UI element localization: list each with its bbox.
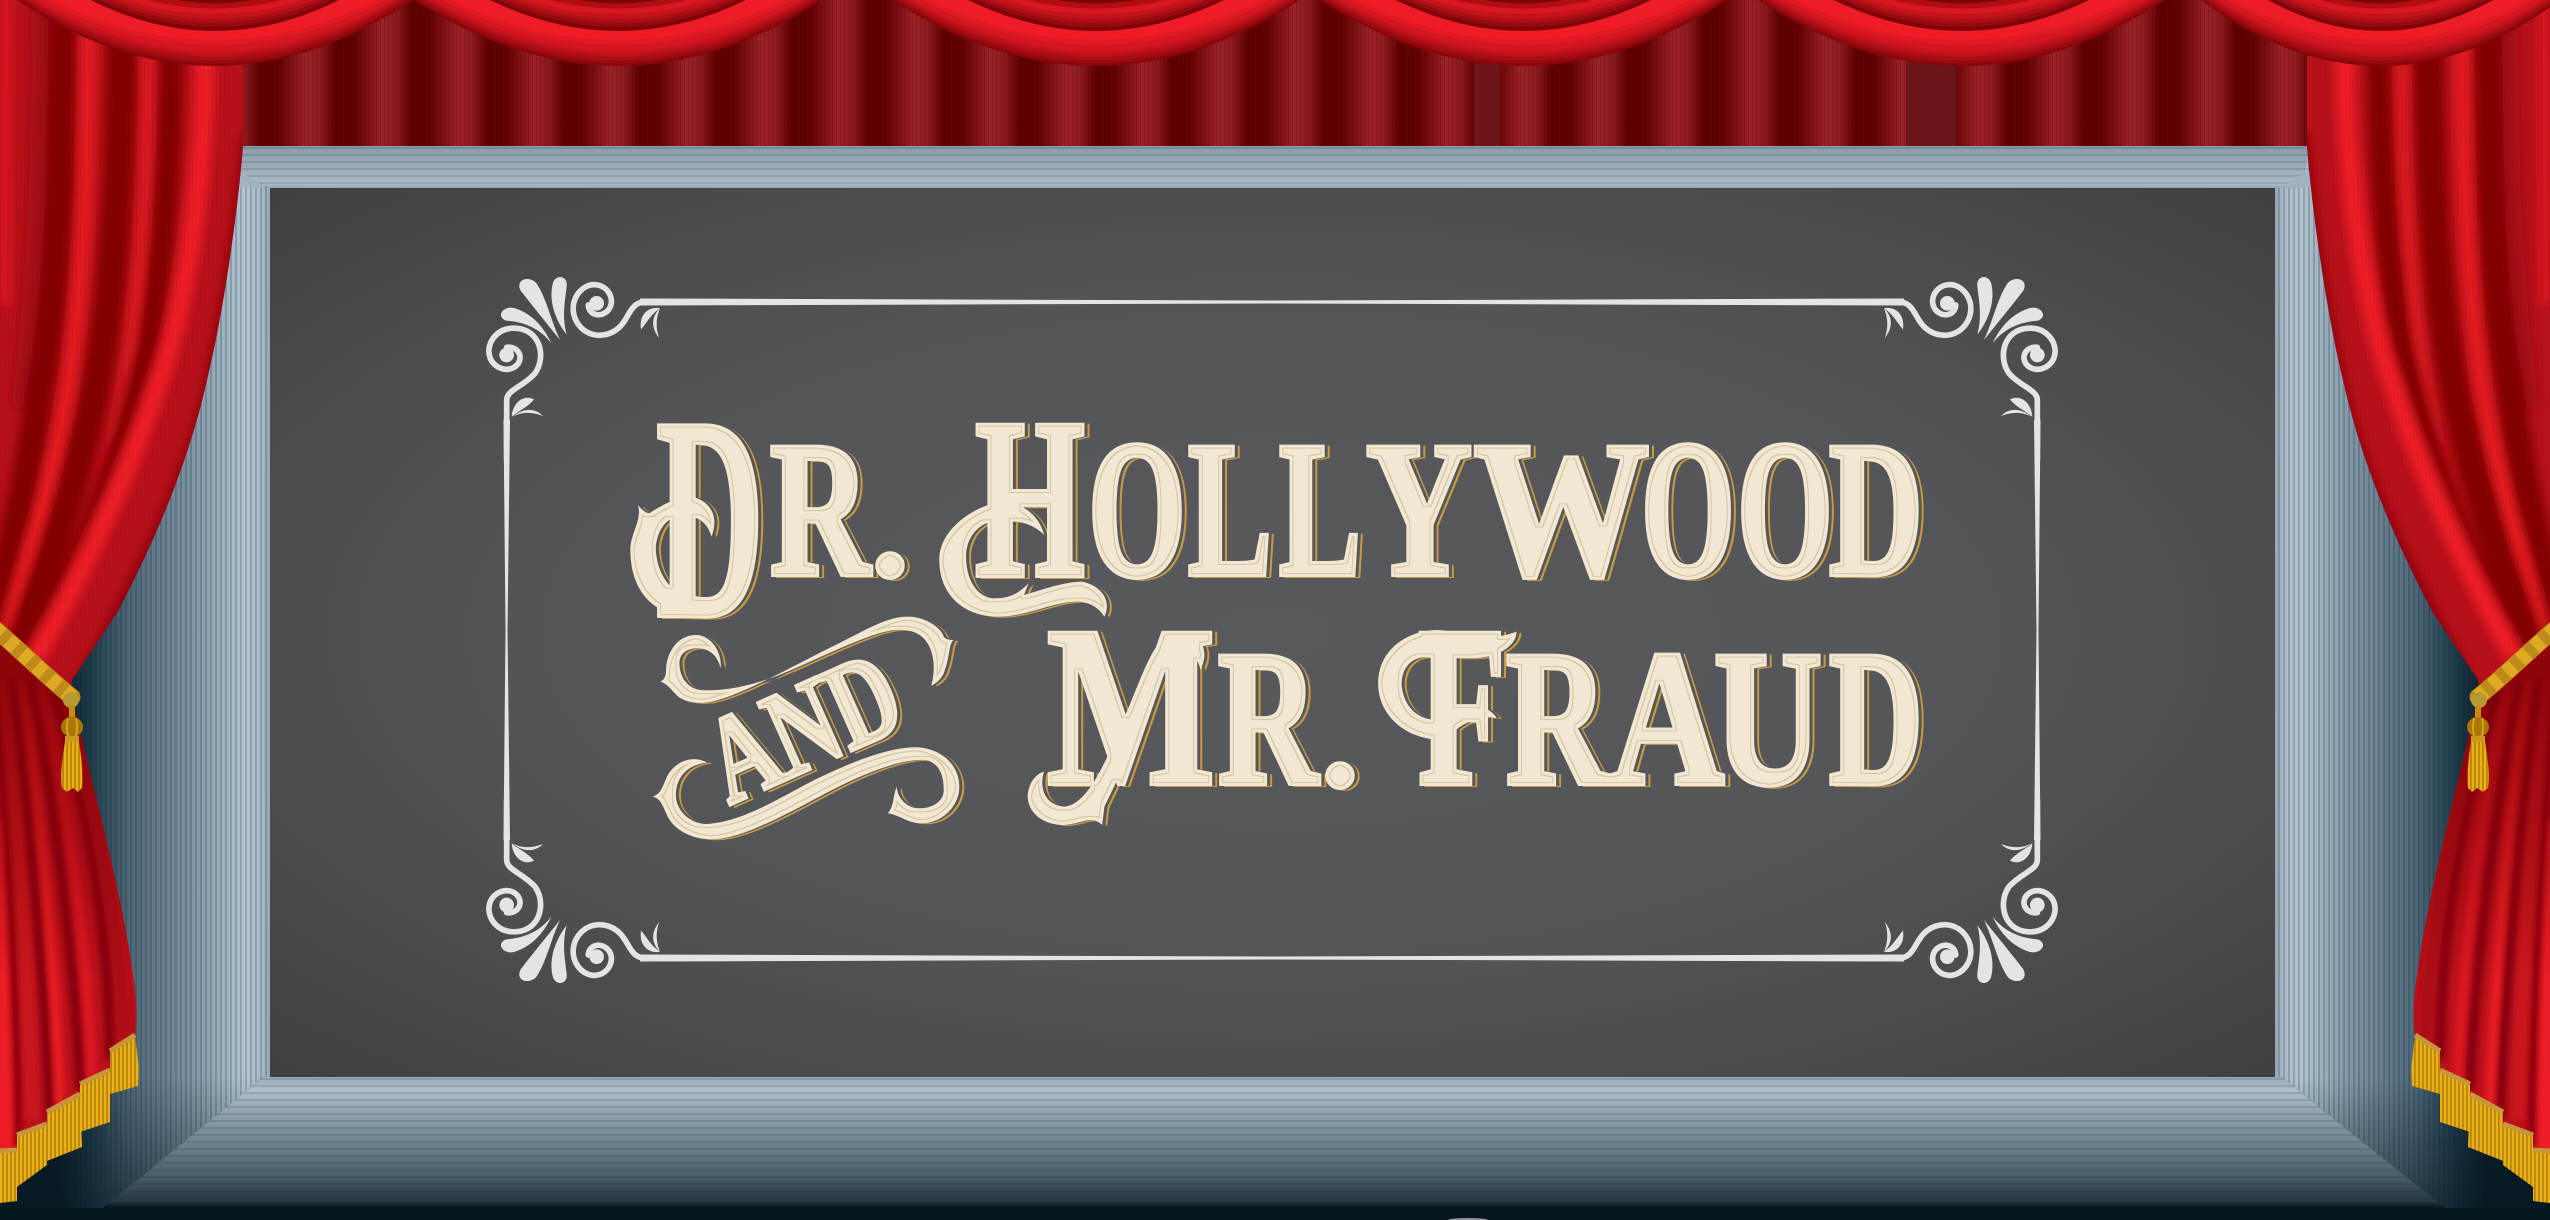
top swag valance [17,0,2550,66]
heading: Dr. Hollywood: O [1737,401,1833,618]
corner ornament: top left [489,277,727,460]
rope tie-back [0,628,79,708]
heading: Dr. Hollywood: R [770,402,872,616]
banner swirls and Mr swash [653,617,1204,839]
heading: Dr. Hollywood: D [1829,402,1923,616]
gold fringe [0,1035,139,1203]
frame lines [504,298,2040,962]
left stage wall [0,146,270,1220]
heading: Mr. Fraud: U [1714,611,1822,825]
stage floor [0,1077,2550,1220]
heading: Mr. Fraud: A [1610,611,1724,825]
swash: Hollywood H [939,502,1107,617]
heading: Dr. Hollywood: O [1641,401,1735,618]
corner ornament: top right [1817,277,2055,460]
heading: Dr. Hollywood: L [1188,402,1272,616]
ornamental frame [489,277,2055,983]
upper drape [0,0,250,710]
swash: Fraud F [1378,630,1517,740]
right stage wall [2275,146,2545,1220]
heading: Dr. Hollywood: O [1088,401,1186,618]
heading: Dr. Hollywood: Y [1366,402,1472,616]
heading: Mr. Fraud: D [1829,611,1923,825]
heading: Dr. Hollywood: H [975,373,1085,625]
corner ornament: bottom left [489,800,727,983]
heading: Dr. Hollywood: . [872,451,908,606]
projection screen panel [270,188,2275,1077]
heading: Dr. Hollywood: D [656,359,764,678]
left curtain [0,0,250,1203]
heading: Mr. Fraud: M [1047,581,1215,833]
title lettering [630,359,1923,839]
heading: Dr. Hollywood: L [1279,402,1361,616]
banner word: and: AND [684,624,921,830]
swash: Dr D [630,497,743,617]
corner ornament: bottom right [1817,800,2055,983]
heading: Mr. Fraud: R [1218,611,1320,825]
lower skirt [0,620,140,1160]
heading: Mr. Fraud: . [1322,661,1358,816]
right curtain [2300,0,2550,1203]
heading: Mr. Fraud: R [1506,611,1610,825]
top proscenium band [236,146,2311,188]
back curtain [230,0,2320,148]
heading: Mr. Fraud: F [1418,581,1506,833]
tassel [61,706,83,792]
heading: Dr. Hollywood: W [1474,402,1649,616]
